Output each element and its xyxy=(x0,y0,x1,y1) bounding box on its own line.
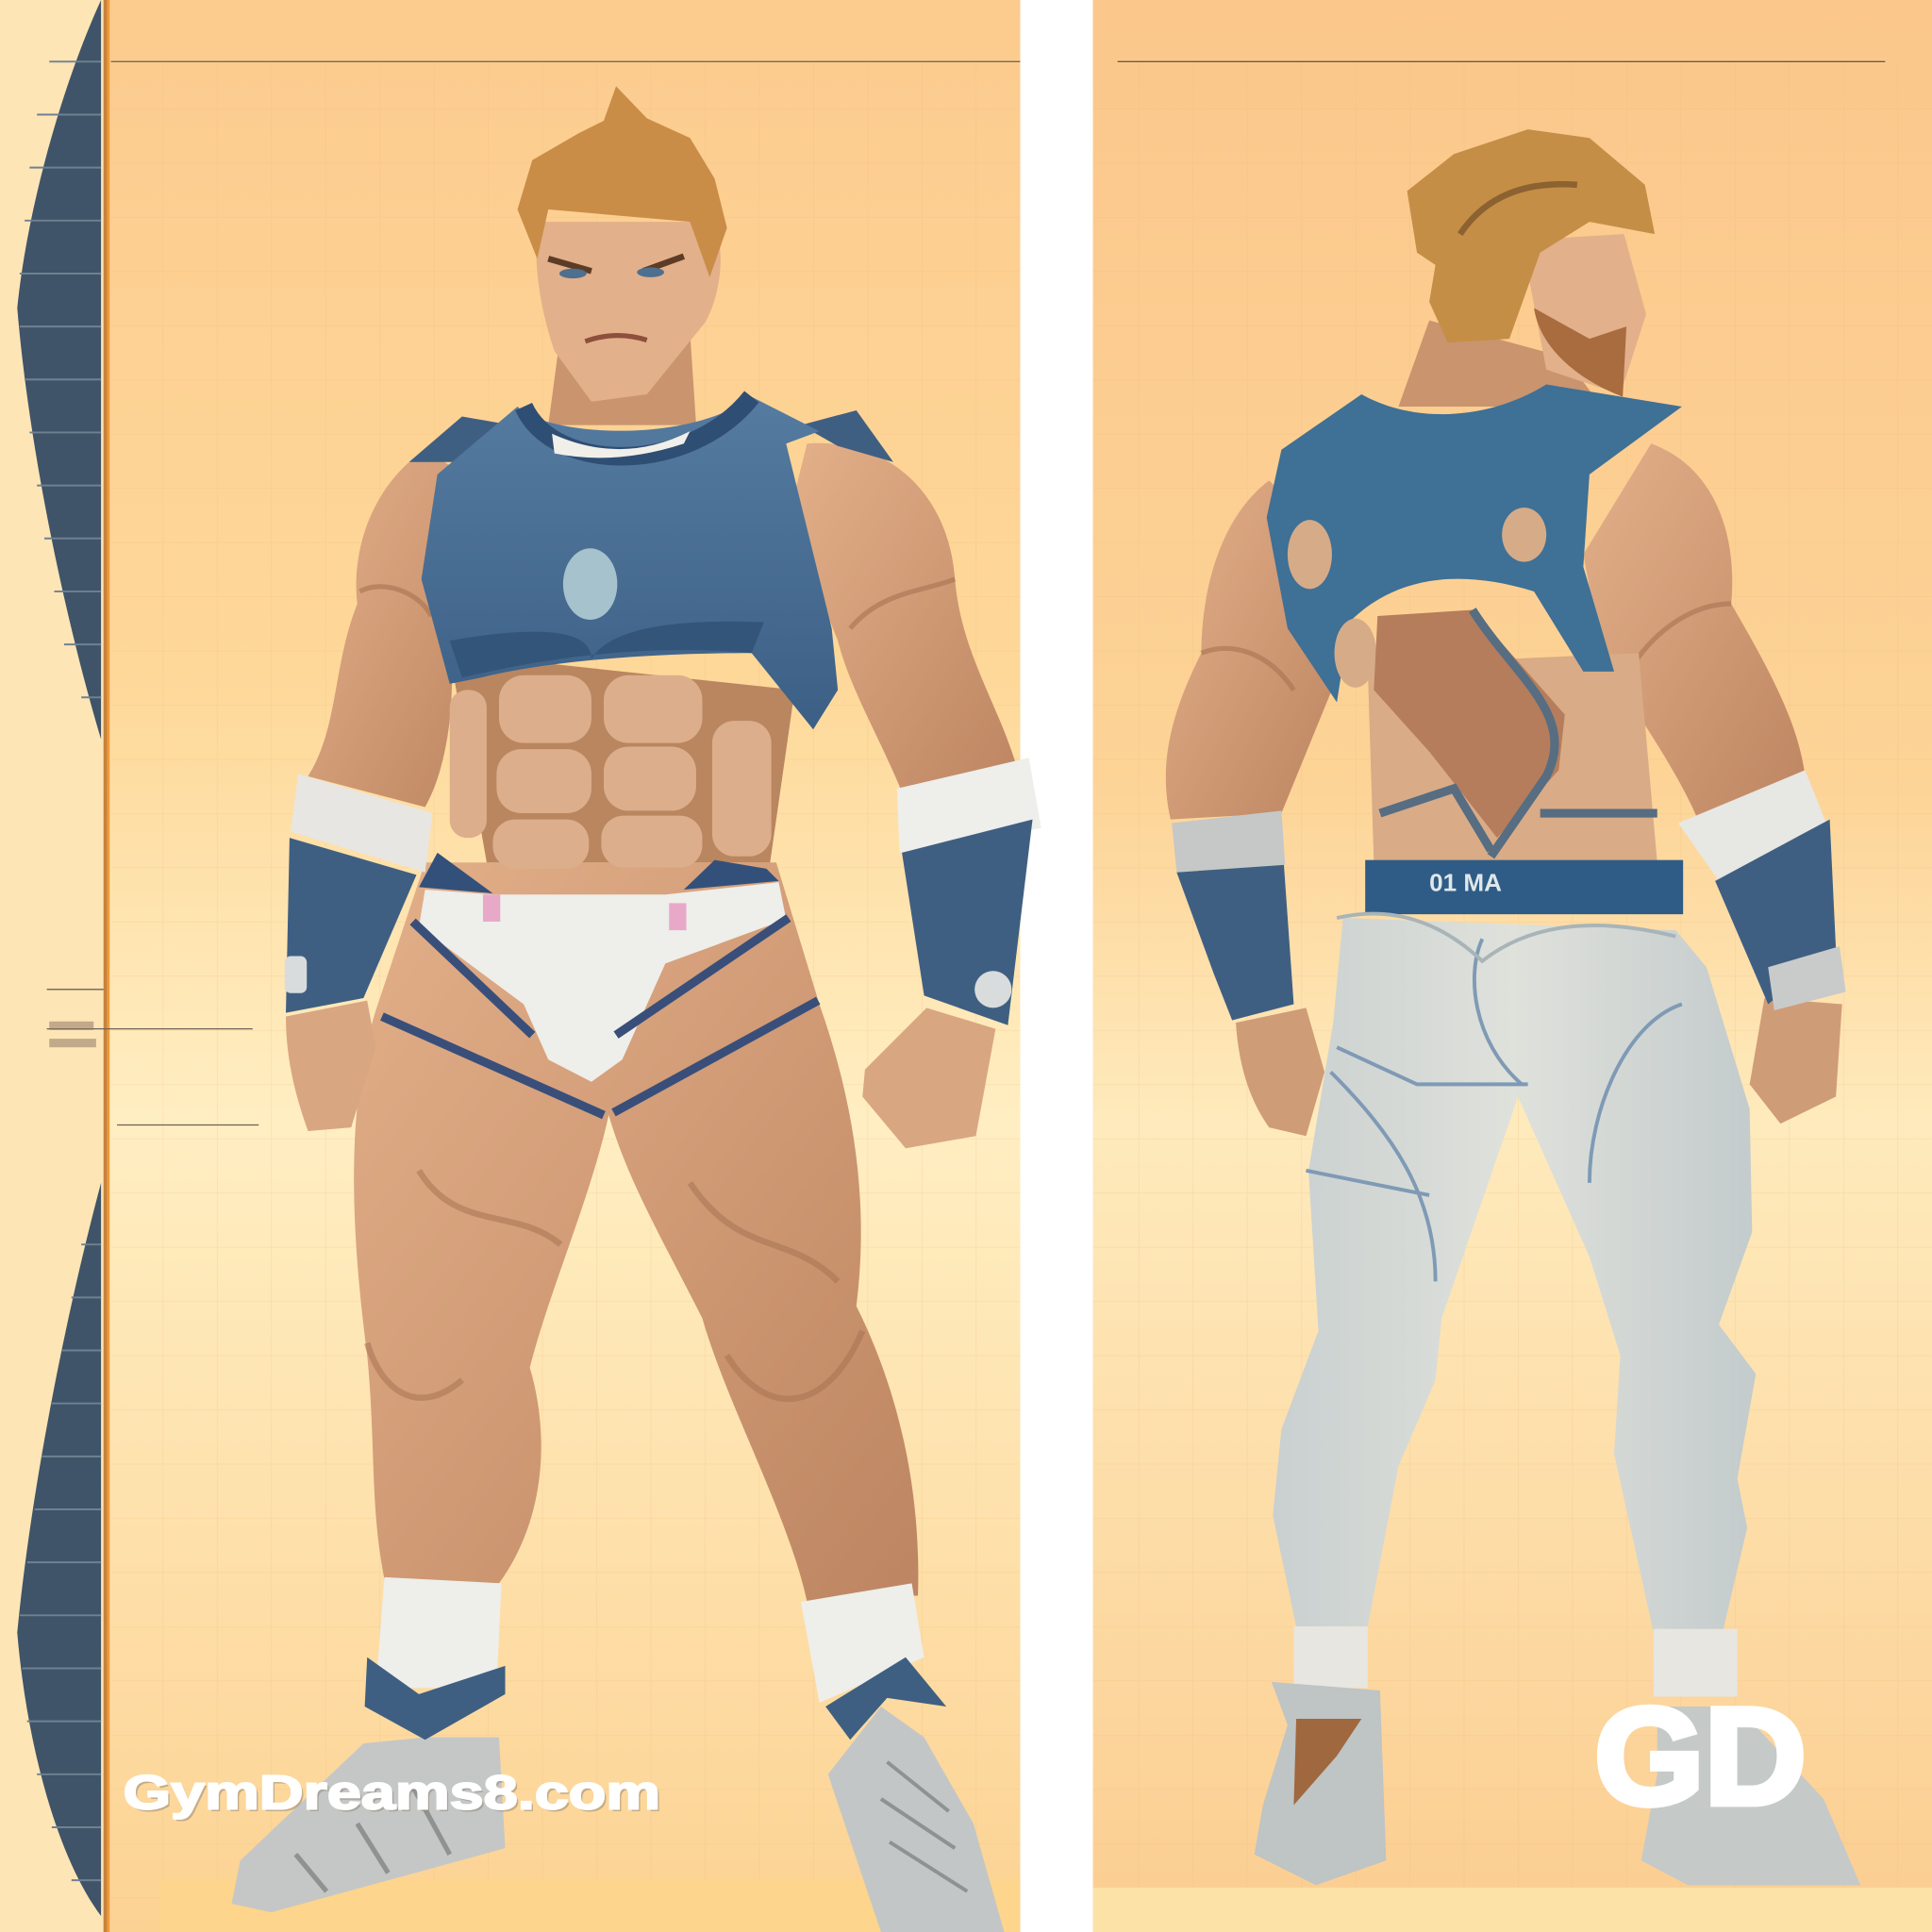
neck and head xyxy=(518,86,727,425)
arms xyxy=(1166,443,1805,825)
legs xyxy=(354,862,918,1602)
wrist bracers xyxy=(1172,770,1846,1020)
shoes xyxy=(1255,1682,1860,1885)
fists xyxy=(286,1001,995,1148)
arms xyxy=(308,443,1018,808)
shorts xyxy=(382,853,818,1115)
back of blue top xyxy=(1267,385,1682,857)
leggings xyxy=(1273,914,1756,1633)
watermark: website address: GymDreams8.com xyxy=(124,1765,660,1819)
panel: front view xyxy=(0,0,1020,1932)
fists xyxy=(1236,998,1842,1136)
ruler strip xyxy=(0,0,258,1932)
shoulder pads xyxy=(409,410,893,462)
blue top xyxy=(422,397,838,729)
head and neck xyxy=(1398,129,1655,407)
back figure xyxy=(1166,129,1860,1885)
belt xyxy=(1365,860,1683,914)
logo: GD monogram: GD xyxy=(1594,1679,1807,1833)
belt: 01 MA xyxy=(1429,868,1502,896)
wrist bracers xyxy=(285,758,1041,1025)
ankle cuffs xyxy=(1293,1626,1738,1697)
lower back xyxy=(1368,653,1657,862)
torso xyxy=(450,653,794,869)
front figure xyxy=(232,86,1041,1932)
socks xyxy=(375,1577,924,1703)
panel: back view xyxy=(1093,0,1932,1932)
shoes xyxy=(232,1657,1004,1932)
top measuring line xyxy=(111,60,1020,62)
floor xyxy=(160,1879,1020,1932)
watermark: website address: GymDreams8.com xyxy=(125,1768,663,1822)
